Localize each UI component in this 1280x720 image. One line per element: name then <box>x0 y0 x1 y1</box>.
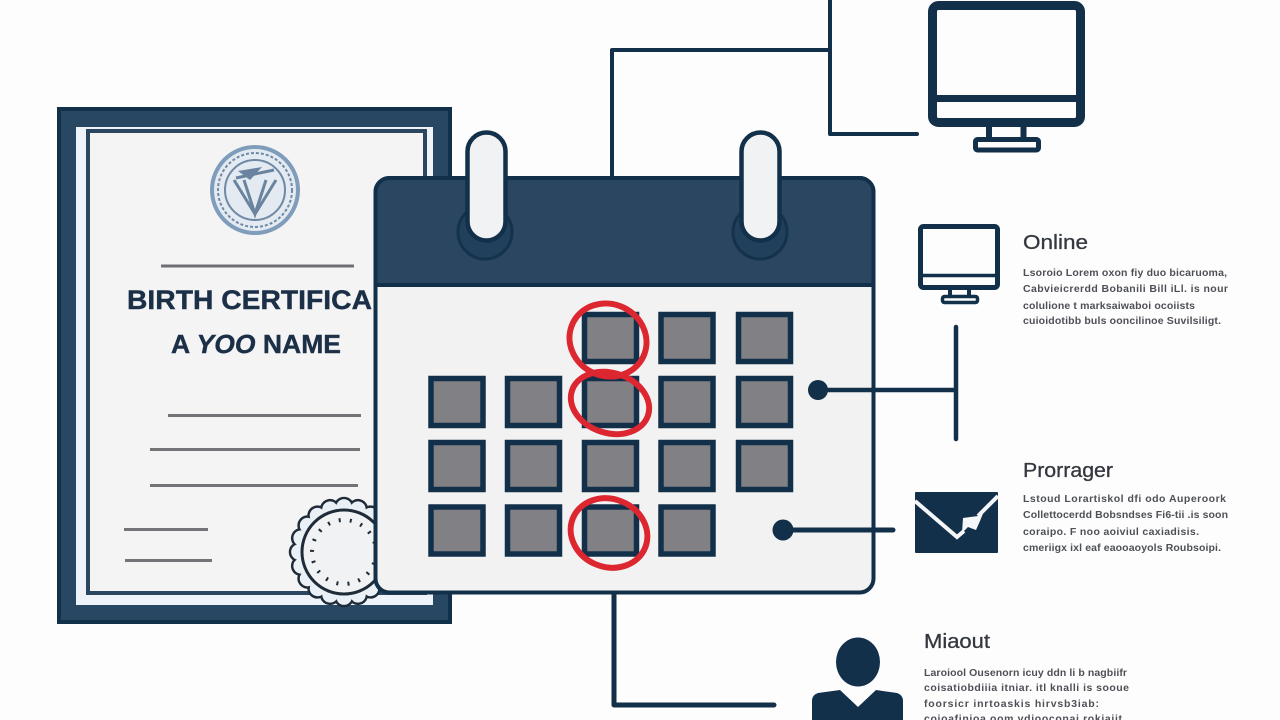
certificate text lines <box>124 414 361 562</box>
calendar ring sockets <box>458 205 787 259</box>
red date circles <box>557 291 659 579</box>
panel: birth certificate <box>59 109 450 622</box>
online body text: colulione t marksaiwaboi ocoiists <box>1023 300 1195 312</box>
certificate name line: A YOO NAME <box>171 329 341 359</box>
heading: online: Online <box>1023 232 1088 254</box>
miaout body text: foorsicr inrtoaskis hirvsb3iab: <box>924 698 1099 710</box>
calendar date grid <box>431 314 790 554</box>
prorrager body text <box>1023 493 1228 554</box>
rule above title <box>161 264 354 268</box>
icon: rosette stamp <box>290 498 398 606</box>
connector: calendar to envelope <box>772 520 893 540</box>
connector: calendar to top monitor <box>612 0 917 178</box>
miaout body text: Laroiool Ousenorn icuy ddn li b nagbiifr <box>924 667 1127 679</box>
online body text: Lsoroio Lorem oxon fiy duo bicaruoma, <box>1023 267 1227 279</box>
block: miaout <box>924 631 1129 720</box>
online body text: cuioidotibb buls ooncilinoe Suvilsiligt. <box>1023 315 1221 327</box>
icon: envelope <box>915 492 998 553</box>
icon: small monitor <box>920 226 998 302</box>
prorrager body text: Collettocerdd Bobsndses Fi6-tii .is soon <box>1023 509 1228 521</box>
icon: large monitor <box>932 6 1080 150</box>
icon: certificate seal <box>212 147 298 233</box>
online body text <box>1023 267 1228 327</box>
prorrager body text: cmeriigx ixl eaf eaooaoyols Roubsoipi. <box>1023 542 1221 554</box>
calendar header <box>376 178 874 285</box>
panel: calendar <box>376 132 874 592</box>
connector: calendar to person <box>614 594 774 705</box>
heading: miaout: Miaout <box>924 631 990 653</box>
block: online <box>1023 232 1228 327</box>
online body text: Cabvieicrerdd Bobanili Bill iLl. is nour <box>1023 283 1228 295</box>
connector: calendar to online <box>808 327 956 439</box>
icon: person <box>812 638 903 720</box>
prorrager body text: coraipo. F noo aoiviul caxiadisis. <box>1023 526 1199 538</box>
miaout body text <box>924 667 1129 720</box>
heading: prorrager: Prorrager <box>1023 460 1113 482</box>
prorrager body text: Lstoud Lorartiskol dfi odo Auperoork <box>1023 493 1226 505</box>
block: prorrager <box>1023 460 1228 554</box>
miaout body text: coisatiobdiiia itniar. itl knalli is sooue <box>924 682 1129 694</box>
certificate title: BIRTH CERTIFICA <box>127 285 372 315</box>
calendar binder rings <box>468 132 780 240</box>
